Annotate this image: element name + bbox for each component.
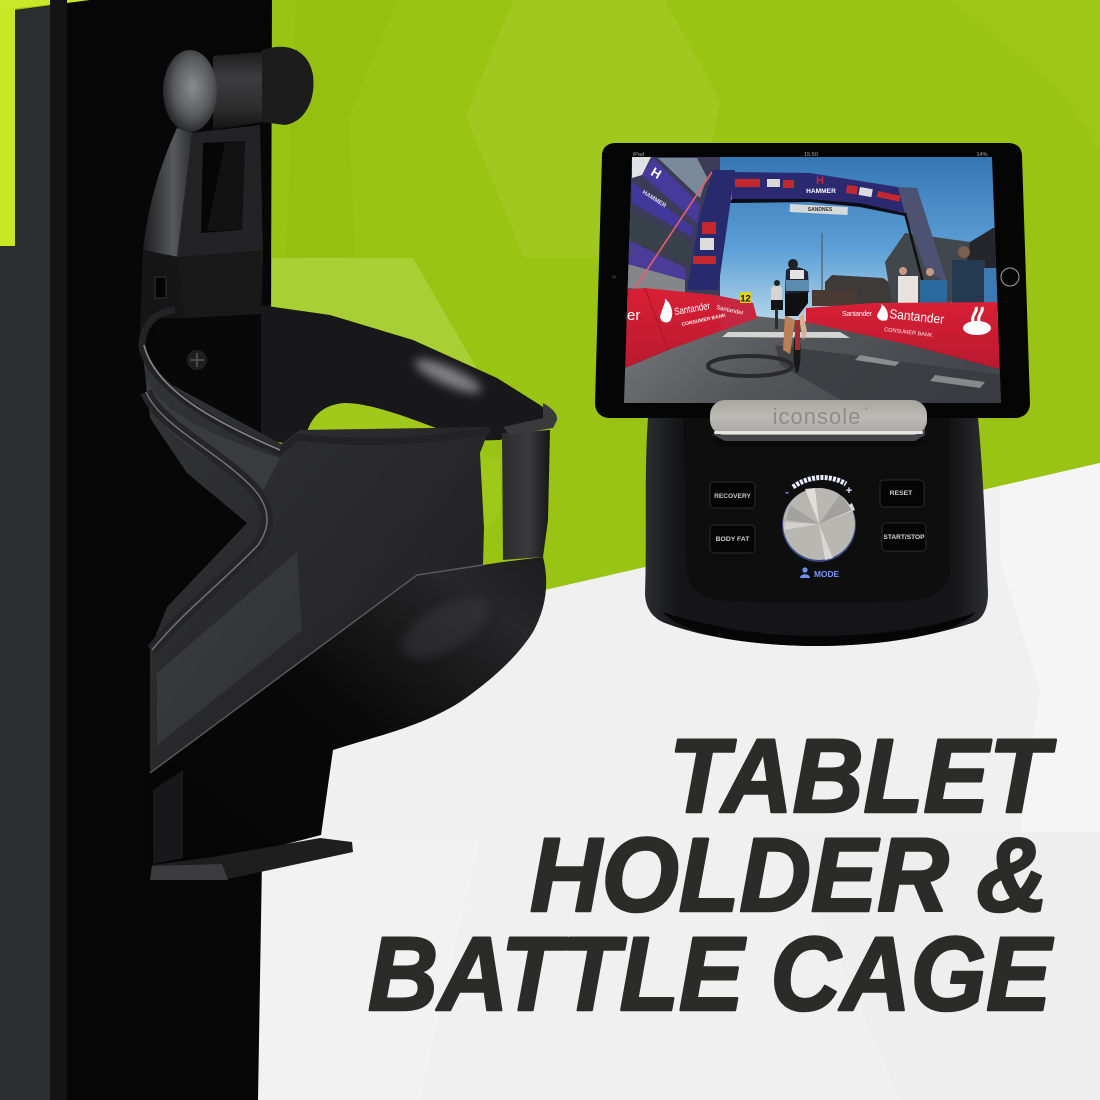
finish arch: HAMMER [806,188,836,195]
knob arm [143,128,193,257]
status bar: 14% [976,152,988,158]
tablet [595,143,1030,418]
lower cup and neck [150,557,546,865]
left building: H [648,164,664,182]
knob barrel [213,50,297,130]
button: body fat: BODY FAT [716,536,750,543]
left sponsor barrier: CONSUMER BANK [681,313,727,328]
black frame post [0,0,272,1100]
headline line: BATTLE CAGE: BATTLE CAGE [368,916,1054,1033]
left sponsor barrier: er [627,307,640,324]
km sign: 12 [740,294,751,304]
button: recovery [710,482,755,508]
right sponsor barrier: CONSUMER BANK [884,327,933,339]
mounting foot [150,838,353,880]
knob dome [163,50,217,132]
strap rim cap [503,403,557,435]
post stripe under cup [153,770,183,864]
resistance level arc [785,478,852,499]
left sponsor barrier: Santander [674,301,711,318]
lower edge highlight [150,565,483,773]
camera [612,275,616,279]
sandnes sign: SANDNES [808,207,833,213]
iconsole clamp plate: iconsole [773,404,861,429]
houses [825,228,1003,304]
right sponsor barrier: Santander [889,306,946,327]
road [620,316,1005,405]
status bar: 15:50 [804,152,818,158]
background: green panel with facets [0,0,1100,660]
bracket with window [140,125,263,330]
headline line: TABLET: TABLET [669,718,1056,835]
control dial [782,488,856,562]
background: white diagonal panel with facets [0,463,1100,1100]
rear rider [771,280,783,329]
green slot [480,453,501,528]
cup wall highlight [411,353,485,399]
cup back wall [260,305,557,445]
headline [368,718,1056,1033]
right sponsor barrier [806,302,1003,370]
resistance level arc: + [846,485,852,497]
finish arch [687,170,948,290]
bottle cage with tablet arm [140,47,557,880]
console lower lip [662,612,976,646]
button: body fat [710,525,755,553]
tablet screen: race finish video [620,157,1005,405]
home button [1001,268,1019,286]
mode label: MODE [814,569,840,579]
right sponsor barrier: Santander [842,311,873,318]
cup smudge highlight [392,585,498,671]
bracket gap and screw [150,314,261,445]
status bar [633,152,988,158]
button: start stop: START/STOP [883,534,925,541]
right strap [502,430,550,560]
iconsole clamp plate: + [864,404,869,413]
console base [645,418,988,646]
resistance level arc: - [785,485,789,499]
left building: HAMMER [641,190,667,210]
left sponsor barrier [620,288,757,370]
sky [620,157,1005,322]
side rib and rim [142,310,490,650]
headline line: HOLDER &: HOLDER & [530,817,1048,934]
status bar: iPad [633,152,644,158]
lamp post [821,233,823,290]
button: reset [880,480,924,507]
iconsole clamp plate [710,400,927,446]
tablet bezel [595,143,1030,418]
console inner black panel [683,418,950,603]
spectators [812,246,998,306]
knob end cap [262,47,313,125]
left building [624,157,720,300]
lead rider [783,259,809,373]
angled grip panel [157,552,302,745]
left sponsor barrier: Santander [716,305,744,317]
mode label [800,567,840,579]
green gap in bowl [307,403,436,435]
button: start stop [882,523,926,551]
cage front body [142,347,490,773]
sandnes sign [790,204,848,215]
button: recovery: RECOVERY [714,493,751,500]
button: reset: RESET [890,490,913,497]
finish arch: H [816,175,824,187]
road shadows and finish line [708,332,1003,405]
